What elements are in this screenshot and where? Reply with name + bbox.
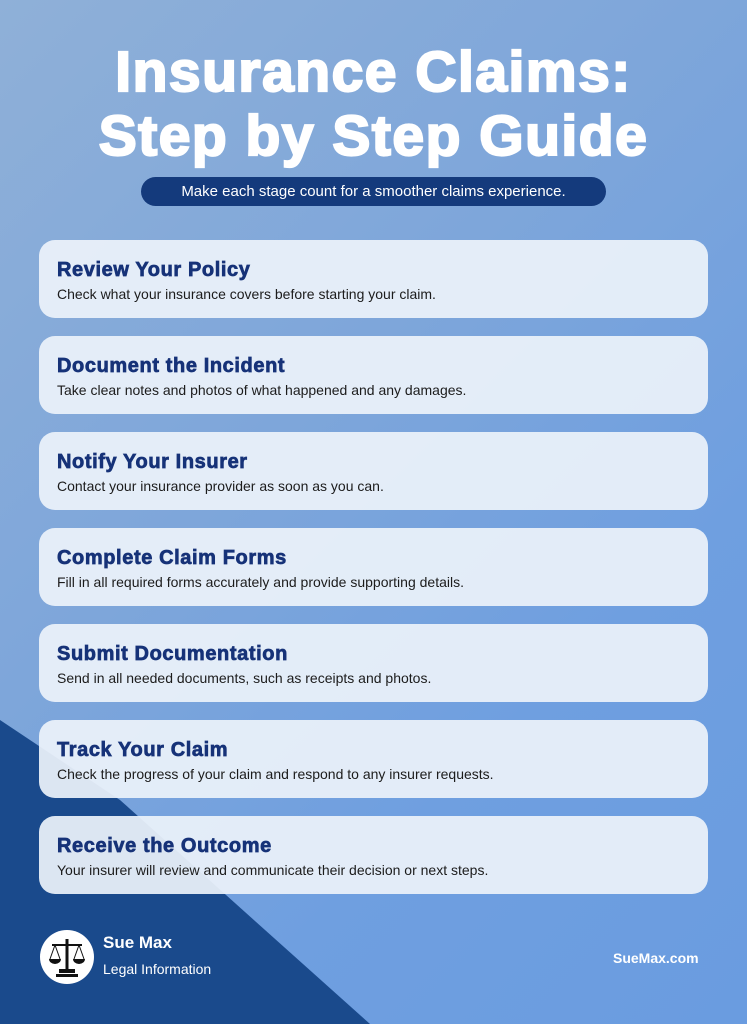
icon: scales: [40, 930, 94, 984]
card: step 7: [39, 816, 708, 894]
website: SueMax.com: [613, 950, 699, 966]
subtitle pill: Make each stage count for a smoother claims experience.: [181, 183, 566, 200]
card: step 6: Track Your Claim: [57, 739, 228, 761]
title: Step by Step Guide: [99, 104, 648, 168]
subtitle pill: [141, 177, 606, 206]
card: step 7: Your insurer will review and communicate their decision or next steps.: [57, 862, 488, 878]
card: step 2: Document the Incident: [57, 355, 285, 377]
card: step 2: Take clear notes and photos of what happened and any damages.: [57, 382, 466, 398]
brand text: Legal Information: [103, 961, 211, 977]
card: step 5: [39, 624, 708, 702]
card: step 3: Contact your insurance provider as soon as you can.: [57, 478, 384, 494]
card: step 5: Send in all needed documents, such as receipts and photos.: [57, 670, 431, 686]
card: step 7: Receive the Outcome: [57, 835, 272, 857]
card: step 1: [39, 240, 708, 318]
card: step 6: [39, 720, 708, 798]
card: step 1: Check what your insurance covers before starting your claim.: [57, 286, 436, 302]
card: step 4: Fill in all required forms accurately and provide supporting details.: [57, 574, 464, 590]
card: step 5: Submit Documentation: [57, 643, 288, 665]
card: step 3: Notify Your Insurer: [57, 451, 248, 473]
logo: [40, 930, 211, 984]
card: step 3: [39, 432, 708, 510]
title: [99, 40, 648, 168]
brand text: [103, 933, 211, 977]
card: step 1: Review Your Policy: [57, 259, 250, 281]
title: Insurance Claims:: [115, 40, 632, 104]
card: step 2: [39, 336, 708, 414]
card: step 4: [39, 528, 708, 606]
brand text: Sue Max: [103, 933, 172, 952]
card: step 6: Check the progress of your claim and respond to any insurer requests.: [57, 766, 494, 782]
card: step 4: Complete Claim Forms: [57, 547, 287, 569]
